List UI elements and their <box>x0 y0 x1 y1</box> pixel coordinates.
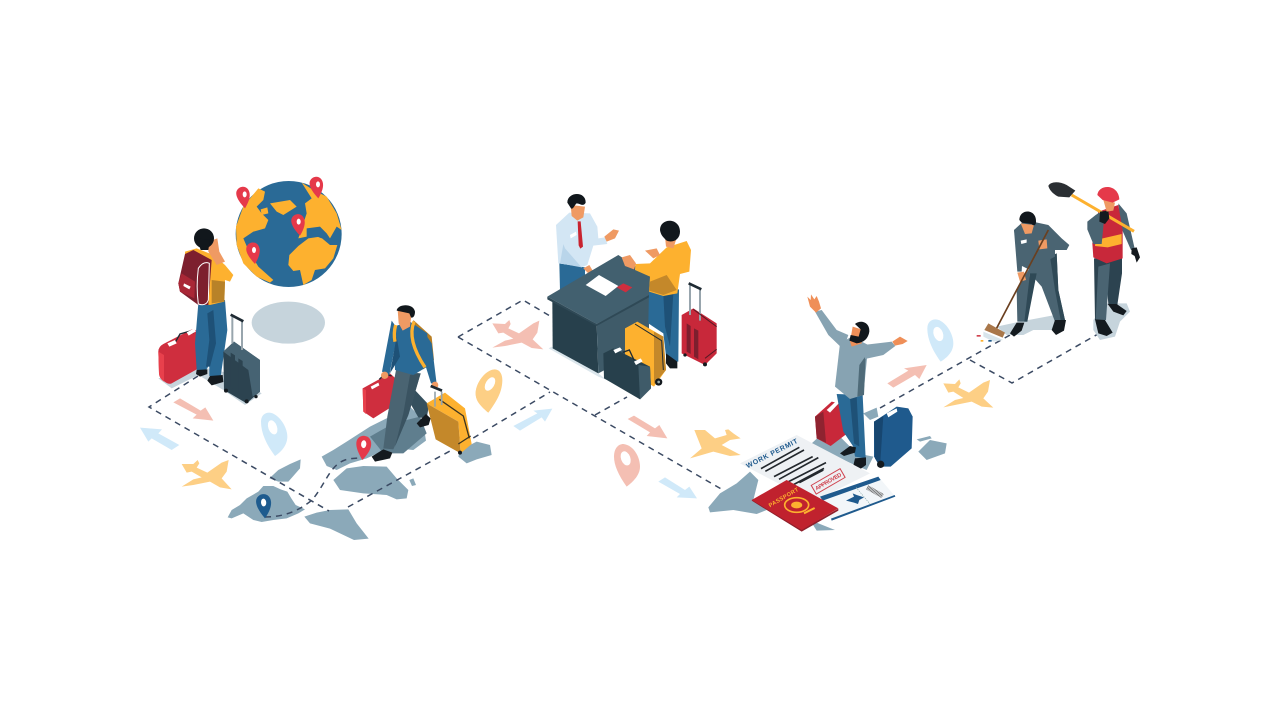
approved stamp: APPROVED <box>814 472 843 492</box>
pins on globe <box>235 176 325 265</box>
counter desk with documents <box>547 255 667 380</box>
orange pin <box>476 370 502 413</box>
passport on desk <box>617 283 632 292</box>
red suitcase <box>815 402 847 446</box>
shadow <box>997 315 1062 335</box>
head <box>1021 223 1034 234</box>
orange pin <box>476 369 502 413</box>
shadow <box>158 367 262 405</box>
desk side <box>597 295 649 373</box>
head <box>850 327 863 347</box>
worker sweeping with broom <box>977 211 1069 342</box>
head <box>208 238 225 265</box>
orange torso <box>185 248 233 305</box>
glove <box>1099 211 1109 224</box>
map pins on world map <box>255 435 372 519</box>
broom <box>996 230 1048 329</box>
shovel <box>1072 195 1134 231</box>
pale blue pin <box>927 319 953 362</box>
hands <box>622 248 660 269</box>
badge <box>1021 239 1027 244</box>
torso <box>1014 220 1069 270</box>
yellow plane right <box>943 379 993 408</box>
heading: WORK PERMIT <box>745 438 800 470</box>
hands <box>583 229 619 278</box>
backpack <box>178 250 212 305</box>
red destination pin <box>355 435 372 461</box>
torso <box>393 322 427 375</box>
hands <box>1017 239 1047 282</box>
head <box>1103 200 1115 212</box>
person with backpack looking at globe <box>158 228 262 405</box>
back leg <box>408 388 429 418</box>
desk front <box>552 301 598 373</box>
dark blue origin pin <box>255 494 272 519</box>
walking traveller with suitcases <box>363 305 472 462</box>
dark suitcase <box>603 348 651 399</box>
decorative plane and arrows, second stage <box>476 320 741 498</box>
form on desk <box>586 275 618 296</box>
decorative plane and arrows, first stage <box>140 369 502 489</box>
tie <box>578 221 583 249</box>
trousers <box>648 289 679 362</box>
vest <box>1092 205 1123 263</box>
backpack straps <box>394 322 425 367</box>
hands <box>807 294 908 346</box>
legs <box>837 394 866 458</box>
pink arrow <box>887 365 927 388</box>
boarding pass <box>820 477 895 521</box>
pale blue arrow <box>658 477 697 498</box>
dark suitcase <box>223 342 260 403</box>
trousers <box>559 263 585 290</box>
world map: third stage <box>708 408 947 531</box>
world map: first stage <box>228 407 492 540</box>
head <box>571 205 585 221</box>
body lines <box>761 447 826 486</box>
yellow plane <box>182 460 232 489</box>
shoes <box>1095 304 1127 336</box>
globe shadow <box>252 302 325 344</box>
pale blue arrow <box>513 409 552 431</box>
right arm <box>1118 203 1135 250</box>
sweater <box>635 241 691 296</box>
worker carrying shovel <box>1048 182 1140 340</box>
red suitcase <box>158 329 202 384</box>
shoes <box>1010 320 1066 337</box>
pink pin <box>614 444 640 487</box>
pale blue pin <box>261 413 287 456</box>
left arm <box>1087 212 1104 244</box>
head <box>665 237 676 248</box>
yellow suitcase <box>427 393 472 453</box>
passport: PASSPORT <box>768 487 800 509</box>
dashed route lines <box>149 300 1098 517</box>
shadow <box>549 347 607 380</box>
legs <box>1017 253 1065 322</box>
legs <box>1094 258 1122 320</box>
arms <box>815 310 895 359</box>
emblem <box>785 498 809 512</box>
backpack <box>413 320 434 369</box>
red suitcase <box>363 373 397 418</box>
map shadow <box>370 417 427 453</box>
arm <box>557 220 587 267</box>
passport <box>752 480 838 532</box>
pink arrow <box>173 398 213 421</box>
work permit document <box>740 435 870 502</box>
front shoe <box>372 449 392 462</box>
badge <box>570 232 577 238</box>
arms <box>382 321 437 384</box>
desk top <box>547 255 667 324</box>
back shoe <box>417 414 431 427</box>
pale arrow, pin <box>887 319 953 388</box>
shirt <box>556 213 607 267</box>
front leg <box>383 370 421 449</box>
blue suitcase <box>874 407 913 467</box>
pink plane <box>492 320 543 349</box>
plane glyph <box>846 493 864 504</box>
shoe <box>666 353 677 368</box>
hands <box>381 372 388 379</box>
debris <box>977 335 981 337</box>
arm <box>1014 227 1023 272</box>
raised-arms man with approved papers <box>807 294 913 472</box>
yellow suitcase <box>625 322 666 387</box>
hard hat <box>1097 187 1119 203</box>
red suitcase <box>682 308 717 365</box>
yellow plane <box>690 429 741 458</box>
shoes <box>840 446 866 472</box>
legs <box>195 300 227 377</box>
globe <box>235 176 342 344</box>
applicant at counter with luggage <box>603 221 717 399</box>
sweater <box>835 337 868 399</box>
blue arrow <box>140 428 179 450</box>
head <box>398 310 412 331</box>
shoes <box>196 369 223 385</box>
barcode <box>867 487 883 496</box>
visa officer behind counter <box>556 194 619 290</box>
shadow <box>1093 303 1130 340</box>
pink arrow <box>628 416 667 438</box>
